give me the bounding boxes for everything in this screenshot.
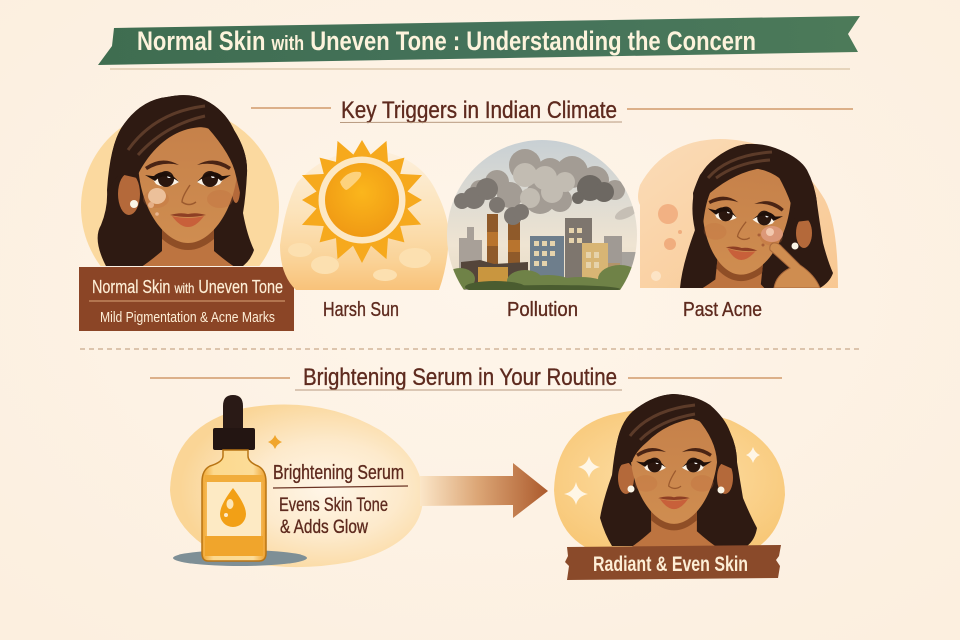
icon: sparkle — [268, 435, 282, 449]
label panel: normal skin with uneven tone — [78, 266, 296, 332]
serum background blob — [170, 404, 423, 567]
heading: brightening serum in your routine: Brightening Serum in Your Routine — [303, 364, 617, 391]
text block: brightening serum: Evens Skin Tone — [279, 495, 388, 516]
heading: key triggers: Key Triggers in Indian Climate — [341, 97, 617, 124]
illustration: past acne — [638, 139, 838, 303]
illustration: pollution — [445, 140, 642, 297]
icon: serum bottle — [173, 395, 307, 566]
illustration: woman with uneven tone — [81, 95, 279, 266]
arrow — [420, 463, 548, 518]
label panel: normal skin with uneven tone: Mild Pigmentation & Acne Marks — [100, 309, 275, 326]
label: past acne: Past Acne — [683, 299, 762, 321]
title banner — [98, 16, 860, 65]
text block: brightening serum — [273, 462, 408, 538]
text block: brightening serum: & Adds Glow — [280, 517, 368, 538]
text block: brightening serum: Brightening Serum — [273, 462, 404, 484]
title banner: Normal Skin with Uneven Tone : Understanding the Concern — [137, 26, 756, 56]
illustration: harsh sun — [280, 136, 449, 290]
label panel: normal skin with uneven tone: Normal Skin with Uneven Tone — [92, 277, 283, 297]
label banner: radiant and even skin — [565, 545, 781, 580]
label: pollution: Pollution — [507, 299, 578, 321]
label banner: radiant and even skin: Radiant & Even Skin — [593, 553, 748, 576]
illustration: radiant woman — [554, 394, 785, 548]
label: harsh sun: Harsh Sun — [323, 299, 399, 321]
